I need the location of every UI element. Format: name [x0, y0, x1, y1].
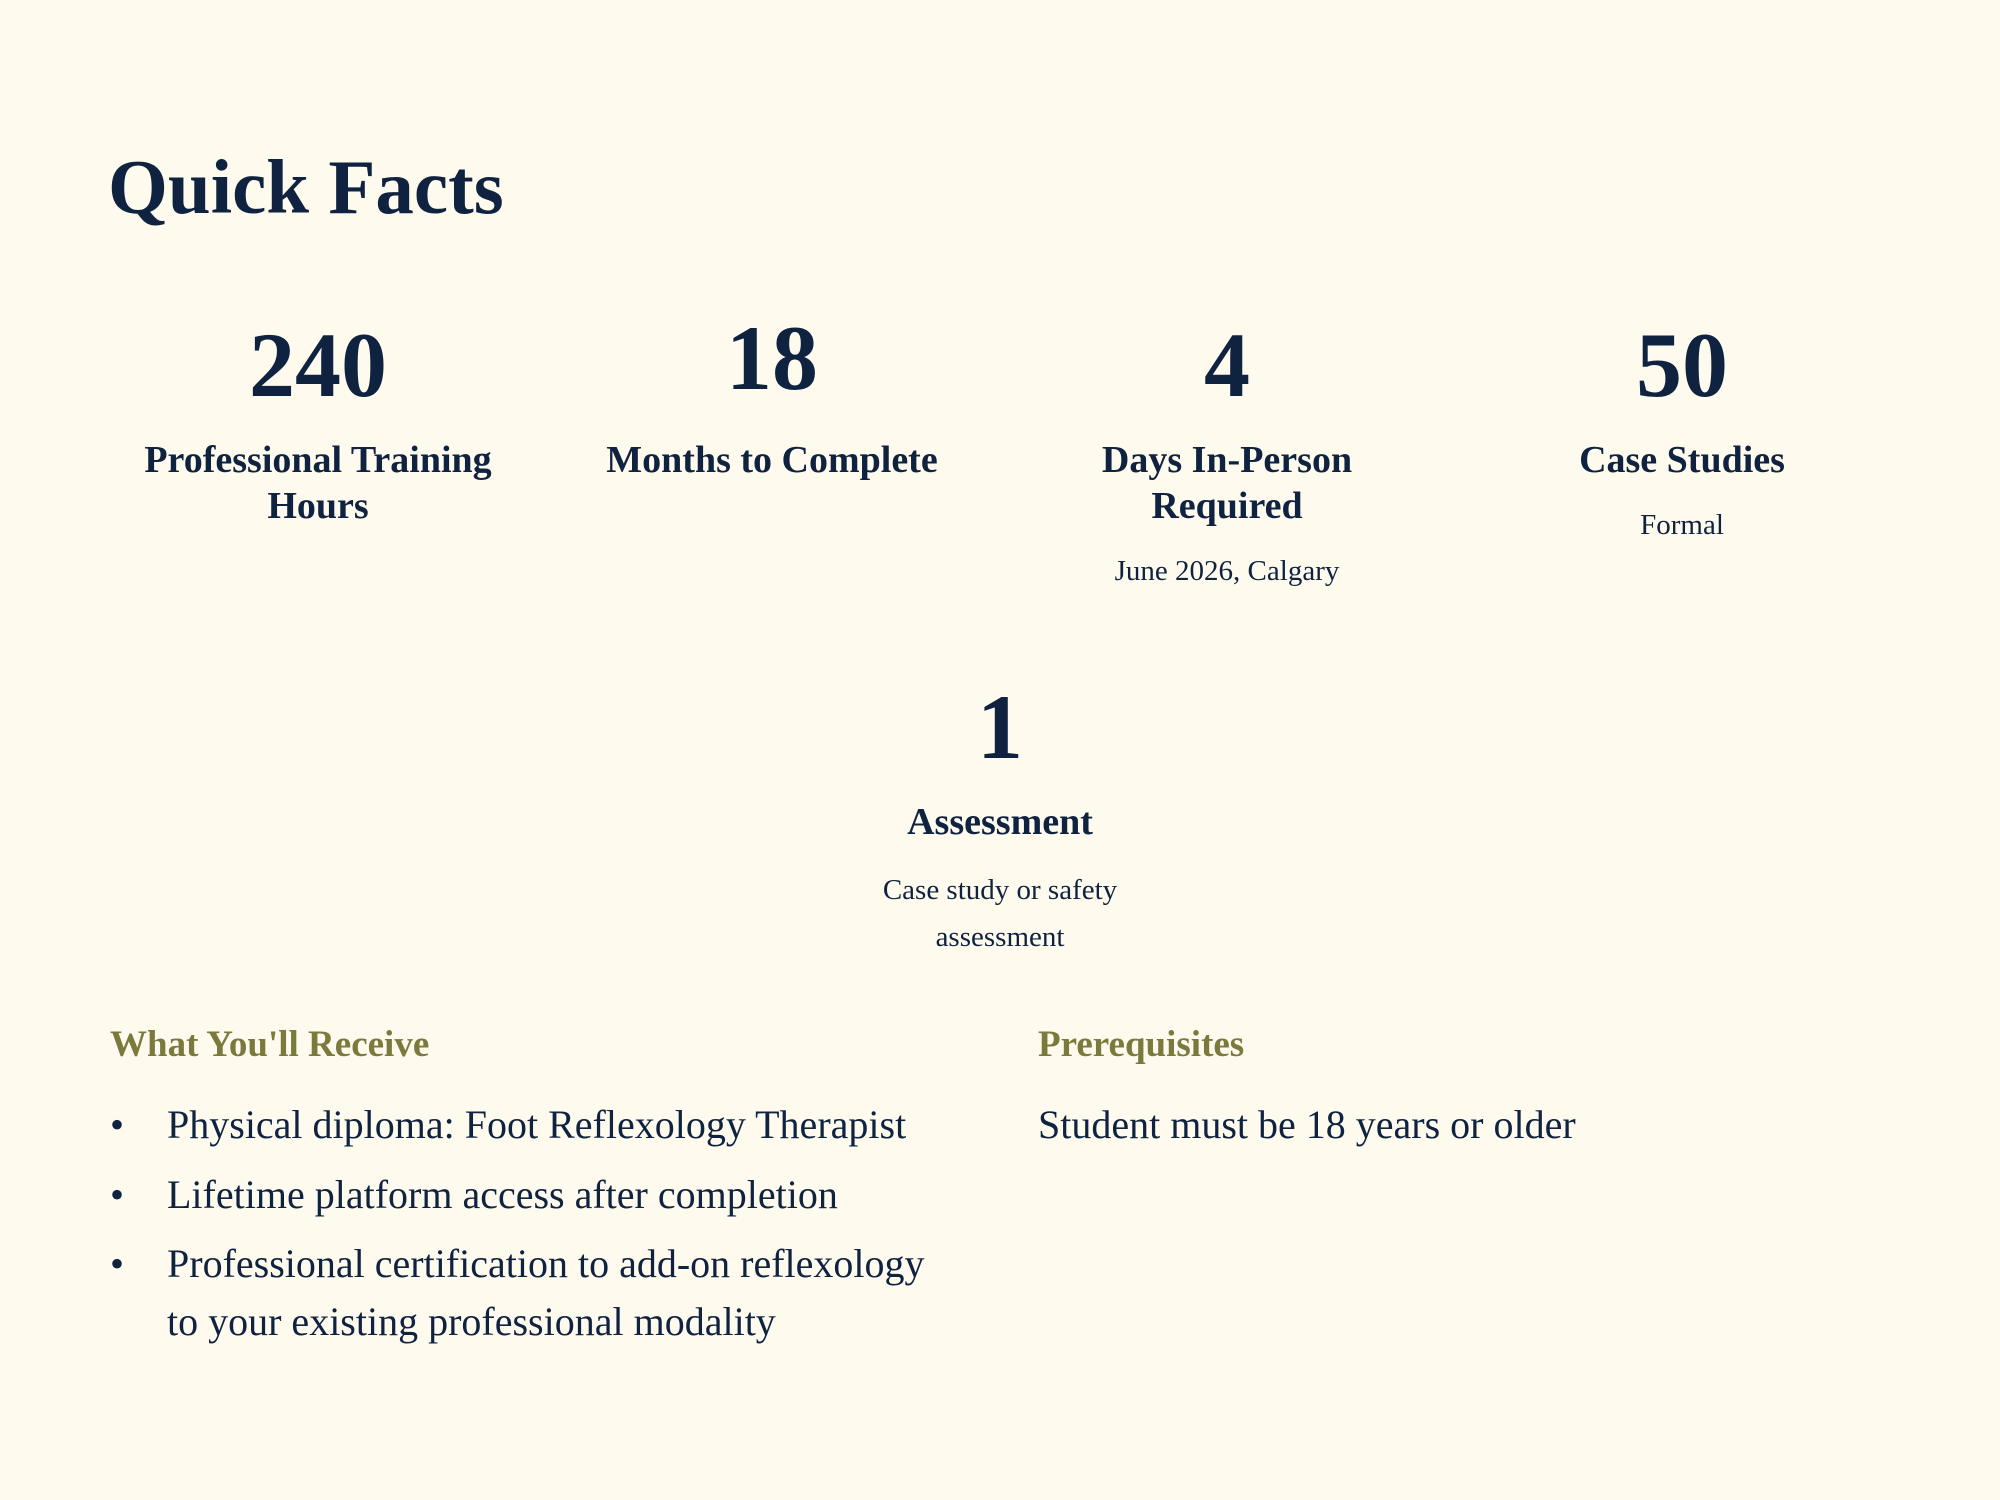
stat: 240 [144, 314, 492, 527]
list: receive items: to your existing professional modality [167, 1299, 776, 1344]
stat: 1 assessment: 1 [977, 676, 1023, 778]
stat: 4: 4 [1204, 314, 1250, 416]
stat: 18: Months to Complete [606, 439, 938, 481]
stat: 240: Professional Training [144, 439, 492, 481]
list: receive items: • [110, 1102, 124, 1147]
list: receive items: Professional certification to add-on reflexology [167, 1241, 925, 1286]
stat: 1 assessment: Case study or safety [883, 874, 1117, 906]
text: prerequisite: Student must be 18 years or older [1038, 1102, 1576, 1147]
stat: 18 [606, 307, 938, 481]
stat: 240: 240 [249, 314, 387, 416]
stat: 4 [1102, 314, 1352, 587]
stat: 50: Case Studies [1579, 439, 1785, 481]
list: receive items: Lifetime platform access after completion [167, 1172, 838, 1217]
list: receive items: • [110, 1241, 124, 1286]
stat: 4: June 2026, Calgary [1115, 555, 1339, 587]
stat: 50: 50 [1636, 314, 1728, 416]
stat: 1 assessment: assessment [936, 921, 1064, 953]
stat: 18: 18 [726, 307, 818, 409]
stat: 240: Hours [267, 485, 369, 527]
stat: 1 assessment [883, 676, 1117, 953]
stat: 50 [1579, 314, 1785, 541]
heading: what you'll receive: What You'll Receive [110, 1024, 429, 1065]
list: receive items: Physical diploma: Foot Reflexology Therapist [167, 1102, 906, 1147]
title: Quick Facts [108, 144, 504, 230]
stat: 1 assessment: Assessment [907, 801, 1093, 843]
list: receive items [110, 1102, 925, 1344]
list: receive items: • [110, 1172, 124, 1217]
stat: 50: Formal [1640, 509, 1724, 541]
stat: 4: Required [1151, 485, 1303, 527]
heading: prerequisites: Prerequisites [1038, 1024, 1244, 1065]
stat: 4: Days In-Person [1102, 439, 1352, 481]
